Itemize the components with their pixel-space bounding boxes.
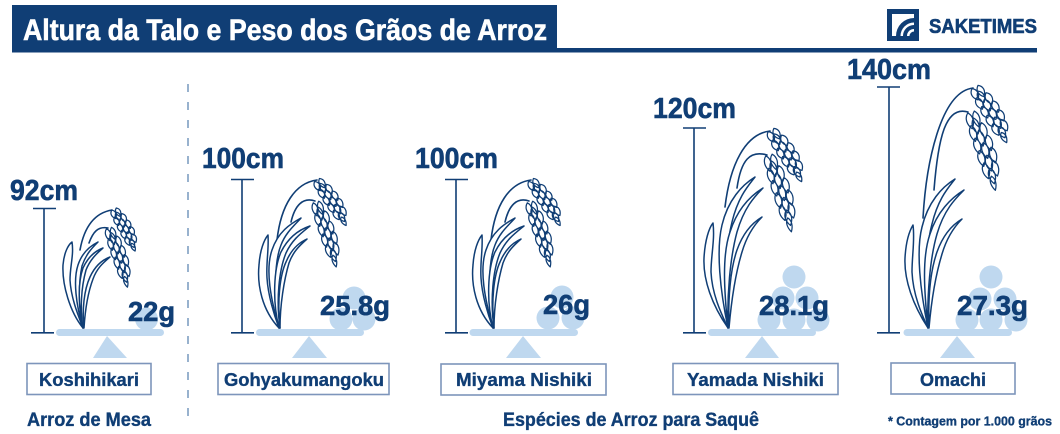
column: Yamada Nishiki: [653, 93, 838, 394]
name box: Koshihikari: [39, 370, 139, 390]
name box: Gohyakumangoku: [224, 370, 384, 390]
name box: [27, 364, 151, 394]
column: Miyama Nishiki: [415, 143, 606, 395]
column: Koshihikari: [10, 175, 175, 394]
name box: [891, 363, 1015, 394]
logo: SAKETIMES: [887, 9, 1037, 41]
rice plant: [473, 175, 568, 328]
balance scale: [256, 329, 364, 358]
column: Omachi: [847, 54, 1028, 394]
footnote: * Contagem por 1.000 grãos: [888, 414, 1052, 428]
column: Gohyakumangoku: [202, 143, 390, 394]
height bracket 100cm: 100cm: [202, 143, 284, 175]
height bracket 100cm: [415, 143, 498, 333]
balance scale: [904, 329, 1012, 358]
balance scale: [56, 329, 164, 358]
grain pile: [956, 266, 1028, 332]
rice plant: [905, 81, 1016, 328]
grain pile: [758, 266, 830, 332]
name box: Miyama Nishiki: [456, 370, 592, 390]
balance scale: [470, 329, 578, 358]
height bracket 92cm: 92cm: [10, 175, 78, 207]
height bracket 120cm: [653, 93, 736, 333]
height bracket 100cm: [202, 143, 284, 333]
title banner: Altura da Talo e Peso dos Grãos de Arroz: [23, 14, 547, 47]
balance scale: [708, 329, 816, 358]
title banner: [12, 5, 1037, 52]
weight 27.3g: 27.3g: [957, 290, 1028, 321]
weight 28.1g: 28.1g: [759, 290, 829, 321]
rice plant: [704, 124, 811, 328]
dashed divider: [187, 84, 189, 426]
weight 26g: 26g: [543, 289, 590, 320]
logo: SAKETIMES: SAKETIMES: [929, 16, 1037, 38]
height bracket 100cm: 100cm: [415, 143, 498, 175]
height bracket 140cm: [847, 54, 931, 333]
name box: Omachi: [920, 370, 986, 390]
height bracket 120cm: 120cm: [653, 93, 736, 125]
name box: [218, 364, 389, 394]
weight 22g: 22g: [128, 296, 175, 327]
name box: Yamada Nishiki: [687, 370, 824, 390]
category label: sake rice: Espécies de Arroz para Saquê: [503, 410, 759, 431]
rice plant: [259, 175, 354, 328]
grain pile: [135, 308, 158, 330]
grain pile: [330, 286, 376, 330]
rice plant: [63, 205, 142, 328]
name box: [441, 364, 606, 395]
height bracket 140cm: 140cm: [847, 54, 931, 86]
category label: table rice: Arroz de Mesa: [27, 410, 151, 431]
grain pile: [536, 286, 584, 330]
name box: [673, 364, 838, 394]
weight 25.8g: 25.8g: [320, 290, 390, 321]
height bracket 92cm: [10, 175, 78, 333]
